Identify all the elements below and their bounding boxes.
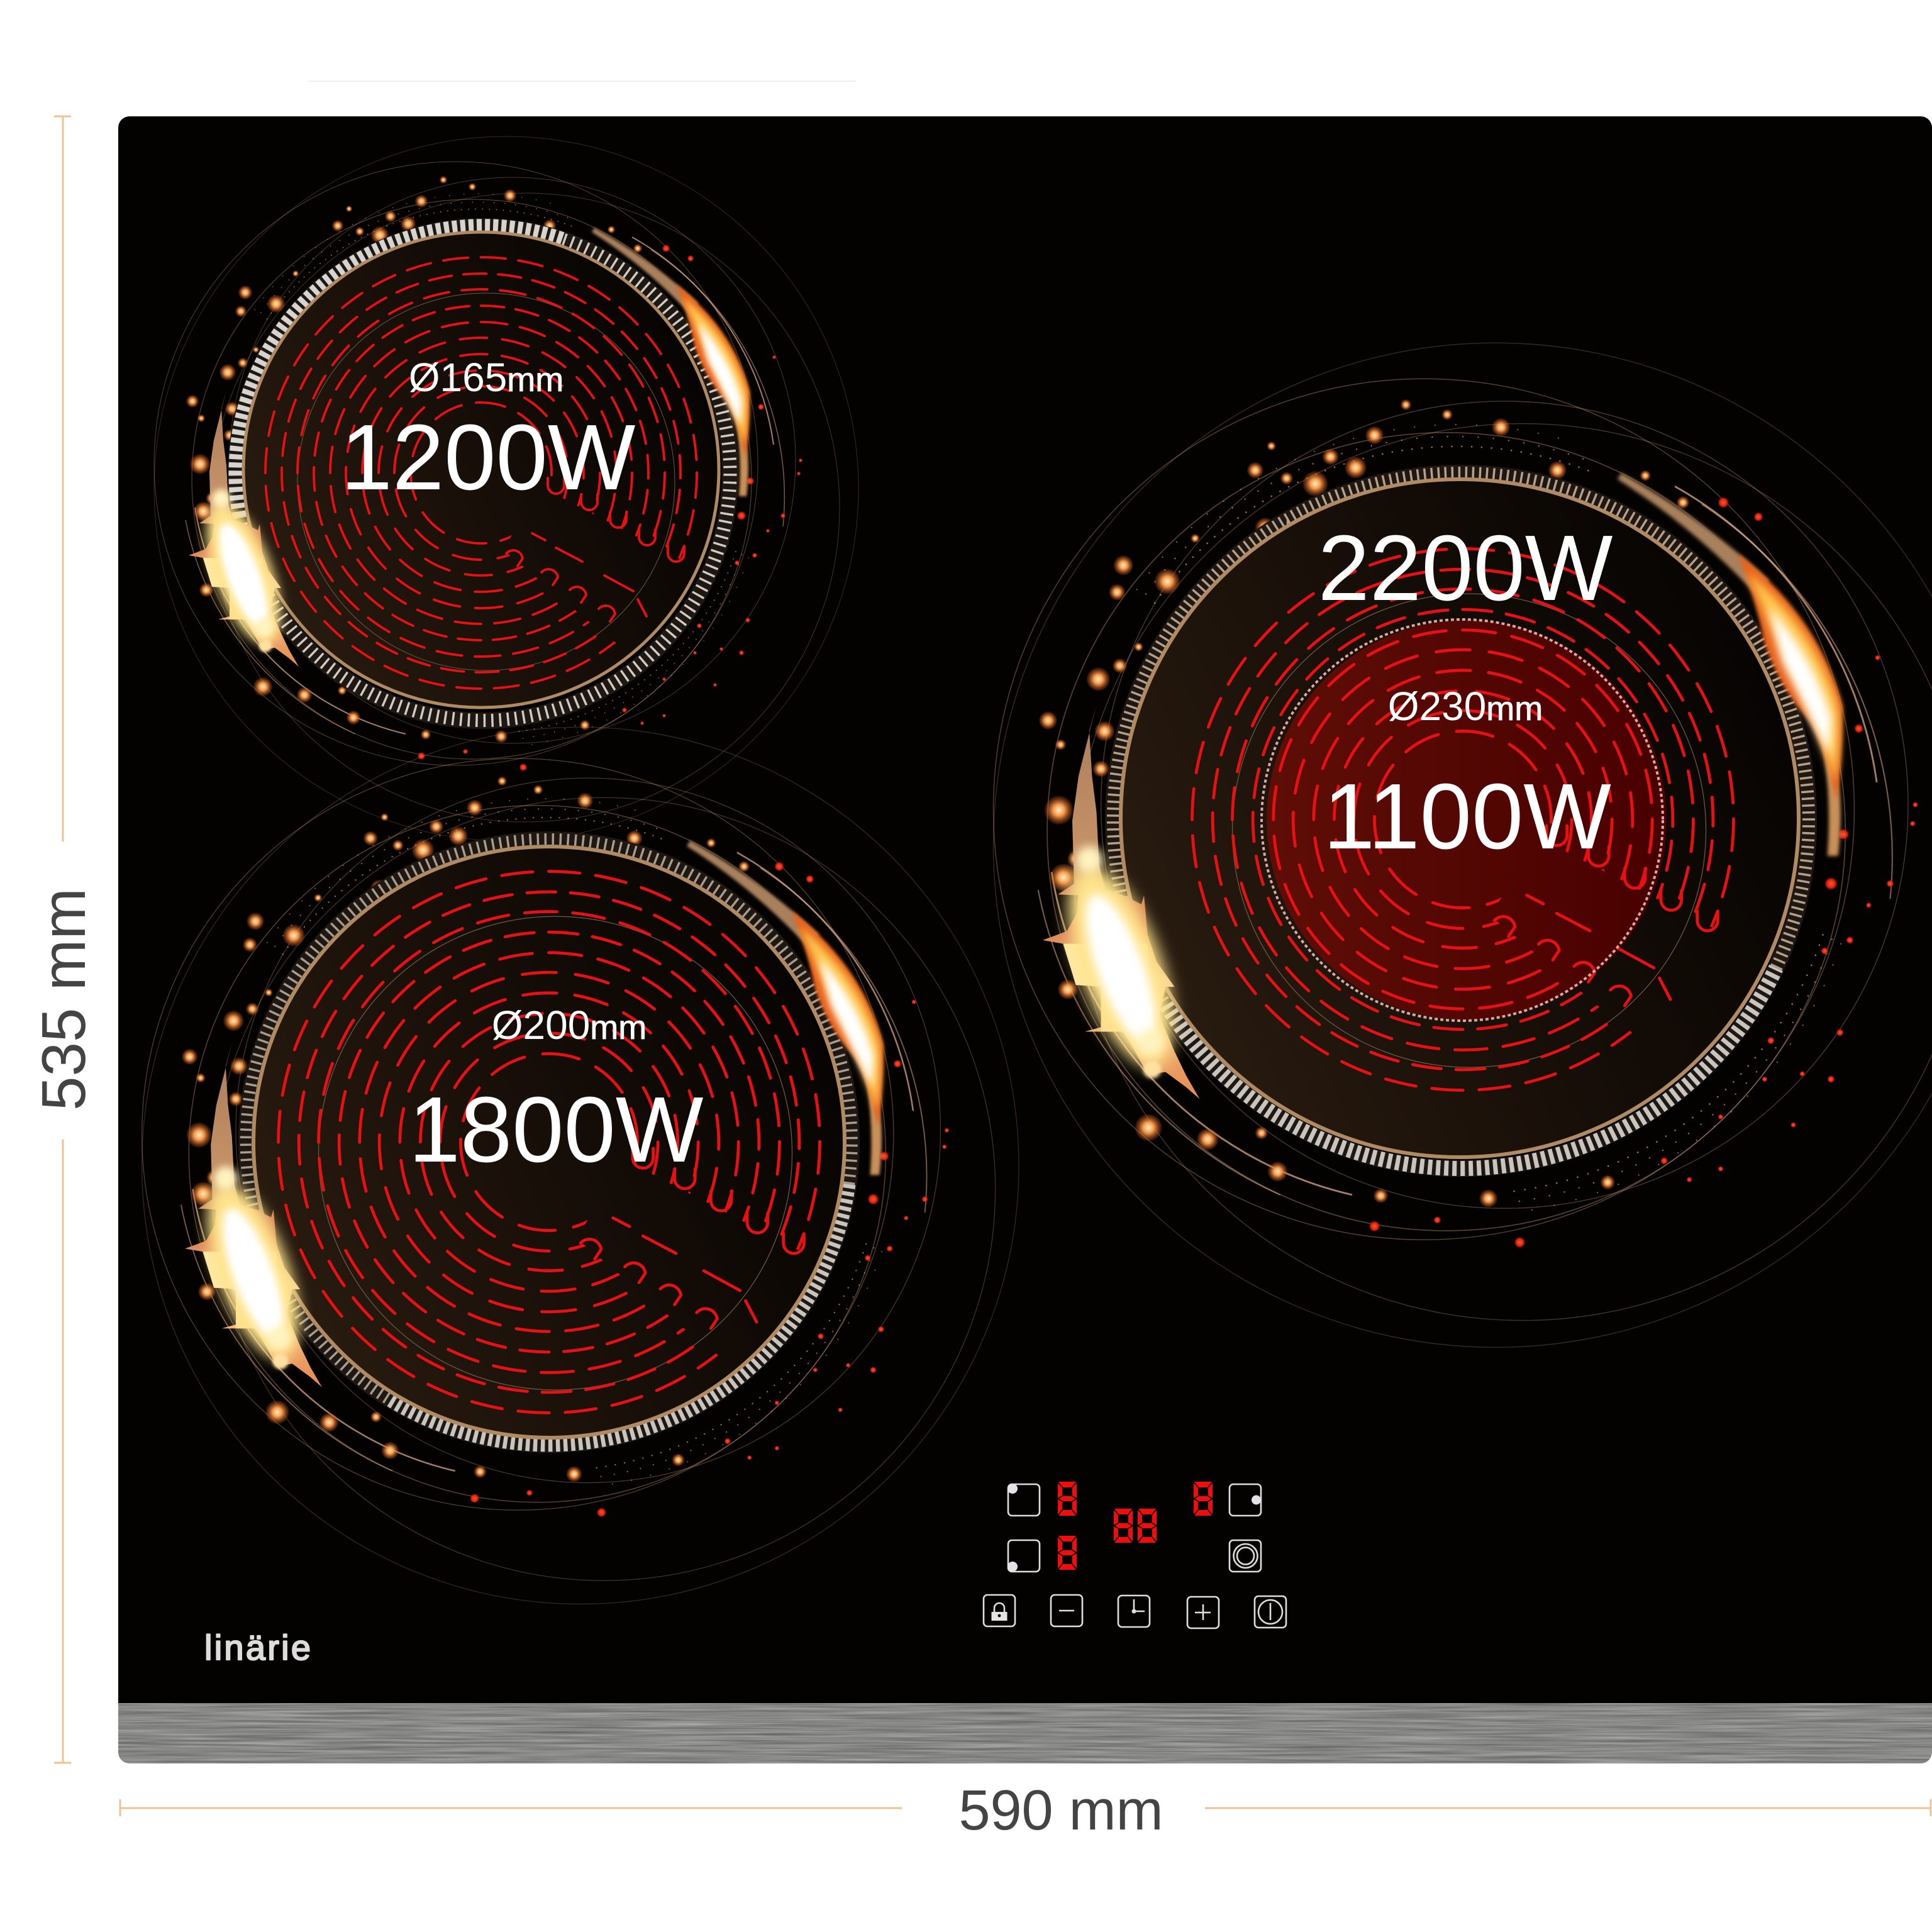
zone key top left	[1008, 1484, 1040, 1516]
height label: 535 mm	[29, 888, 98, 1111]
width dimension line right	[1205, 1799, 1931, 1816]
burner 2 flames	[185, 841, 884, 1387]
burner 3 tick ring	[1113, 473, 1809, 1169]
burner: right dual zone 230 mm	[993, 343, 1932, 1347]
power inner 1100 W: 1100W	[1323, 765, 1611, 869]
burner 3 sparks and orbits	[993, 343, 1932, 1347]
burner 1 coil	[265, 257, 697, 689]
burner 2 sparks and orbits	[142, 727, 1019, 1604]
burner 1 heated disc	[243, 232, 719, 708]
black glass top	[118, 116, 1932, 1703]
width dimension line left	[120, 1799, 902, 1816]
height dimension	[29, 116, 98, 1763]
minus key	[1051, 1595, 1082, 1626]
zone digit bottom left	[1058, 1536, 1077, 1570]
burner 2 coil	[278, 871, 820, 1413]
power 1800 W: 1800W	[409, 1078, 704, 1182]
zone key bottom left	[1008, 1540, 1040, 1572]
power outer 2200 W: 2200W	[1318, 516, 1613, 620]
diameter 165 mm: Ø165mm	[409, 355, 564, 400]
clock key	[1118, 1596, 1150, 1627]
burner 3 flames	[1043, 473, 1843, 1099]
zone digit top left	[1058, 1482, 1077, 1516]
width label: 590 mm	[958, 1779, 1163, 1842]
inner zone dotted outline	[1262, 619, 1663, 1021]
burner 1 sparks and orbits	[154, 136, 858, 841]
control panel	[984, 1482, 1286, 1628]
burner 3 coil	[1192, 548, 1734, 1091]
faint top line	[308, 80, 857, 82]
width dimension	[120, 1779, 1931, 1842]
height dimension line top	[54, 116, 71, 841]
logo: linärie	[204, 1628, 311, 1667]
burner: bottom-left 200 mm	[142, 727, 1019, 1604]
power 1200 W: 1200W	[341, 406, 636, 509]
brushed steel strip	[118, 1703, 1932, 1763]
diameter 200 mm: Ø200mm	[492, 1002, 647, 1048]
burner 2 tick ring	[246, 839, 852, 1445]
label: 200 mm 1800 W	[409, 1002, 704, 1182]
burner: top-left 165 mm	[154, 136, 858, 841]
label: 165 mm 1200 W	[341, 355, 636, 509]
zone digit top right	[1194, 1482, 1213, 1516]
plus key	[1187, 1597, 1219, 1628]
diameter 230 mm: Ø230mm	[1388, 684, 1543, 729]
timer digits	[1114, 1509, 1157, 1543]
zone key top right	[1230, 1484, 1261, 1516]
burner 3 heated disc	[1121, 479, 1799, 1157]
burner 1 tick ring	[236, 226, 730, 721]
inner red zone	[1267, 620, 1667, 1020]
power key	[1255, 1596, 1286, 1628]
height dimension line bottom	[54, 1140, 71, 1763]
burner 1 flames	[189, 228, 750, 667]
label: 230 mm 2200 W 1100 W	[1318, 516, 1613, 869]
burner 2 heated disc	[253, 847, 845, 1438]
lock key	[984, 1595, 1015, 1626]
dual zone key	[1230, 1540, 1261, 1572]
